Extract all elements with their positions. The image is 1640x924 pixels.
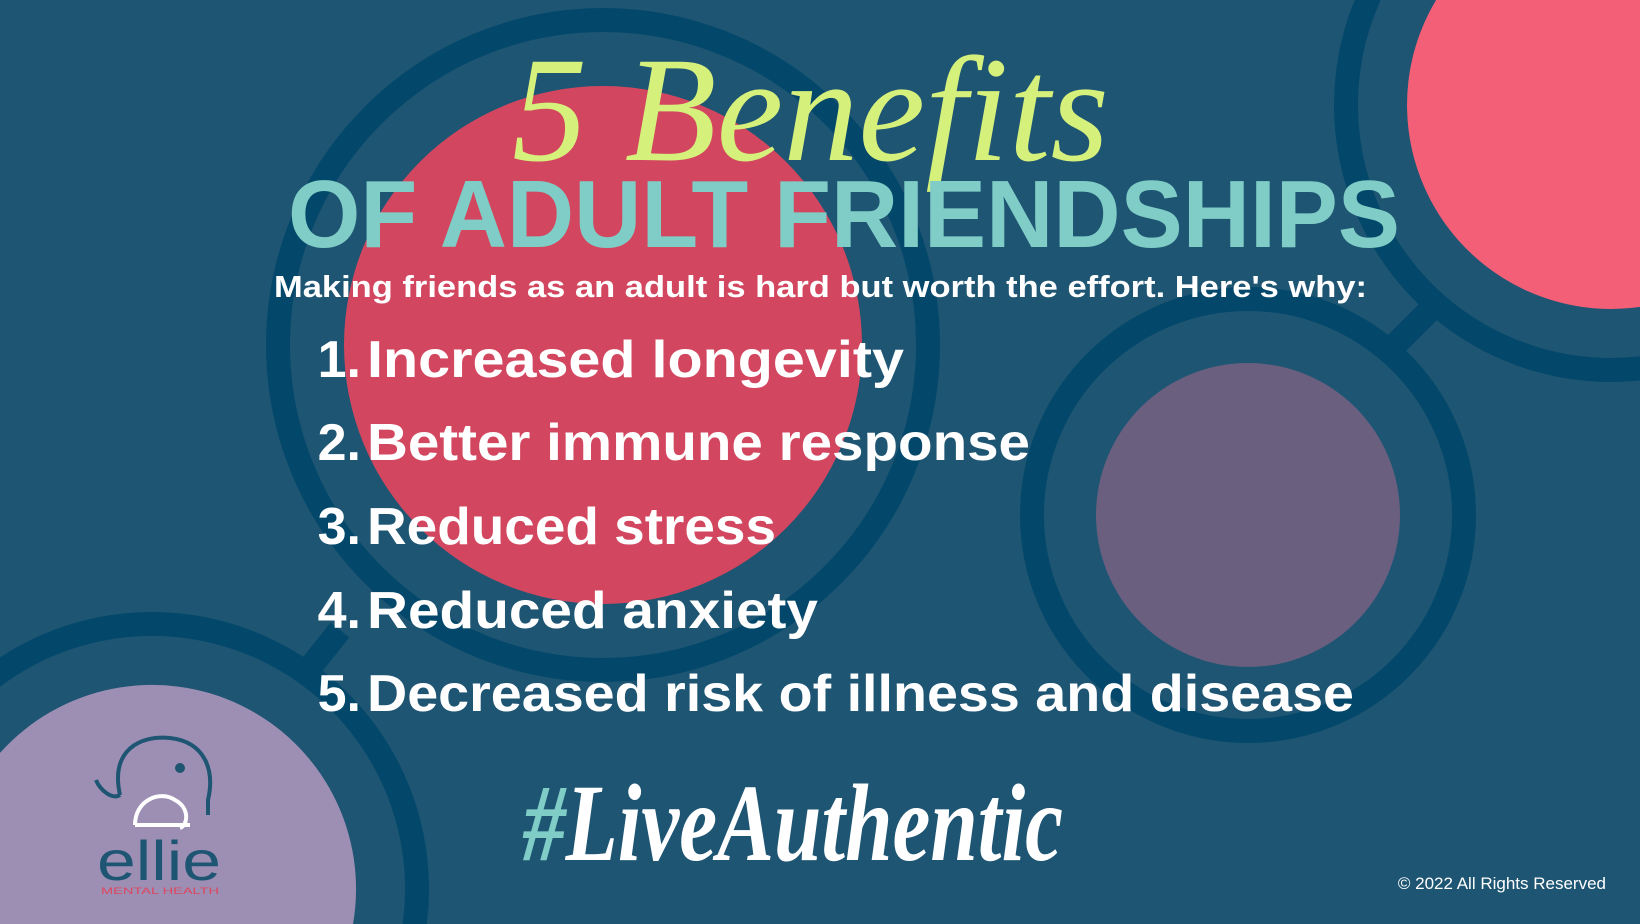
item 1: 1. xyxy=(318,331,361,389)
title: OF ADULT FRIENDSHIPS: OF ADULT FRIENDSHIPS xyxy=(288,161,1400,268)
circle: bottom left lavender xyxy=(0,612,429,924)
icon: elephant xyxy=(96,738,210,828)
item 4: 4. xyxy=(318,582,361,640)
item 3: Reduced stress xyxy=(367,498,776,556)
connector lines xyxy=(300,300,1440,680)
circle: middle right purple xyxy=(1032,299,1464,731)
circle: big red xyxy=(278,20,928,670)
title script: 5 Benefits: 5 Benefits xyxy=(512,27,1109,193)
copyright: © 2022 All Rights Reserved xyxy=(1398,874,1606,893)
item 5: Decreased risk of illness and disease xyxy=(367,665,1354,723)
list of benefits xyxy=(318,331,1354,723)
item 2: 2. xyxy=(318,414,361,472)
logo text: ellie xyxy=(97,829,221,892)
logo: ellie mental health xyxy=(96,738,221,896)
item 5: 5. xyxy=(318,665,361,723)
item 3: 3. xyxy=(318,498,361,556)
logo: ellie mental health: MENTAL HEALTH xyxy=(101,886,219,896)
item 1: Increased longevity xyxy=(367,331,904,389)
subtitle: Making friends as an adult is hard but worth the effort. Here's why: xyxy=(274,269,1367,304)
hashtag: #LiveAuthentic: #LiveAuthentic xyxy=(522,762,1063,884)
circle: top right pink xyxy=(1334,0,1640,382)
item 4: Reduced anxiety xyxy=(367,582,818,640)
item 2: Better immune response xyxy=(367,414,1030,472)
